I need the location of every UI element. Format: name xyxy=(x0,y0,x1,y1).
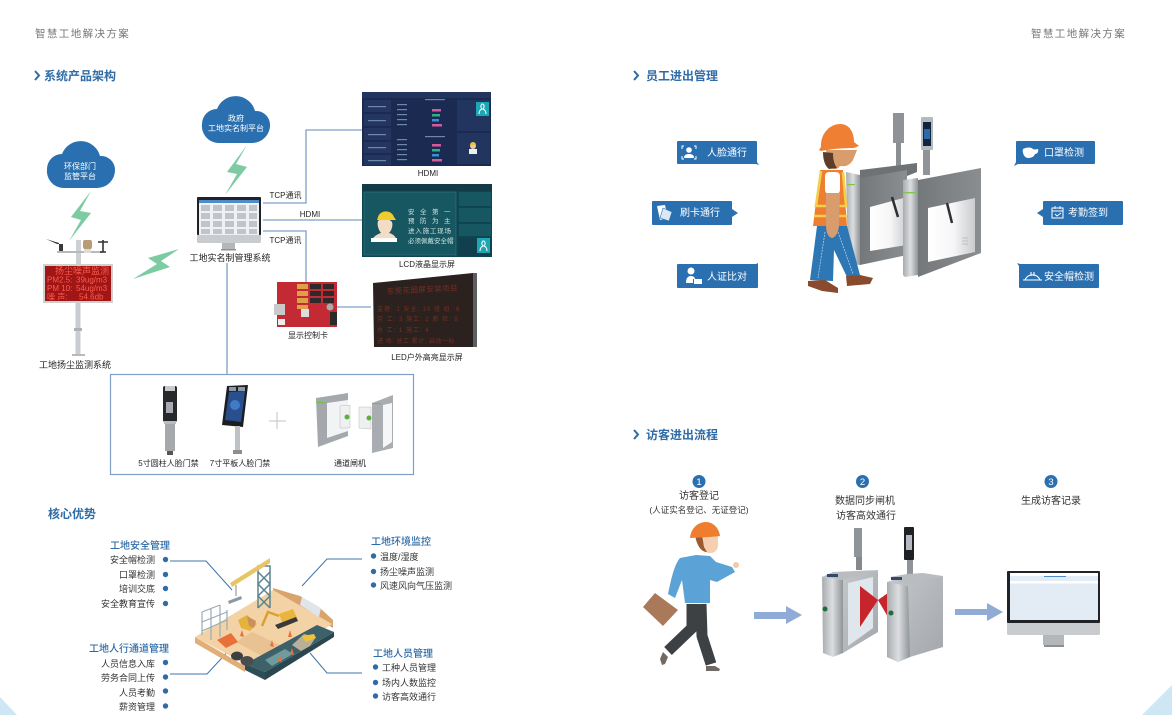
helmet xyxy=(819,124,859,151)
group: 工地安全管理 xyxy=(101,539,170,609)
dashboard screen: HDMI xyxy=(362,92,491,166)
step 2: 数据同步闸机 xyxy=(835,494,895,507)
shirt xyxy=(825,172,840,194)
LED outdoor screen: 进 场: 总工 累计: 启动一标 xyxy=(377,337,455,345)
label: TCP 1: TCP通讯 xyxy=(270,190,302,200)
pipes xyxy=(231,652,243,660)
group: 工地人员管理 xyxy=(373,647,436,702)
connection lines xyxy=(227,130,371,374)
label: 5-inch: 5寸圆柱人脸门禁 xyxy=(138,458,199,468)
scaffold xyxy=(202,605,227,640)
step 1: 1 xyxy=(696,477,702,488)
illustration: visitor walking xyxy=(643,522,739,671)
step 3 xyxy=(1021,475,1081,507)
LCD screen xyxy=(362,184,492,257)
device: channel gate xyxy=(316,393,393,453)
LCD screen: 必须佩戴安全帽 xyxy=(408,236,454,245)
group: 工地人行通道管理: 人员考勤 xyxy=(119,687,155,698)
cloud: 政府工地实名制平台 xyxy=(202,96,270,143)
isometric construction site xyxy=(195,558,334,680)
cloud: 环保部门监管平台 xyxy=(47,141,115,188)
dust monitoring station: PM2.5: xyxy=(47,276,72,284)
arrow 1 xyxy=(754,606,802,624)
heading: 系统产品架构: 系统产品架构 xyxy=(44,68,116,83)
arrow 2 xyxy=(955,603,1003,621)
group: 工地人行通道管理: 工地人行通道管理 xyxy=(89,642,169,655)
cloud: 政府工地实名制平台: 政府 xyxy=(228,113,244,123)
callout: 口罩检测 xyxy=(1014,141,1095,166)
LCD screen: 安全第一 xyxy=(408,207,456,216)
LED outdoor screen: 总 工: 1 施工: 4 xyxy=(377,326,430,334)
heading: 核心优势: 核心优势 xyxy=(48,506,96,521)
monitor: management system xyxy=(197,197,261,250)
excavator xyxy=(279,609,298,627)
label: HDMI link: HDMI xyxy=(300,210,320,219)
panel: core advantages xyxy=(89,535,452,712)
step 2: 访客高效通行 xyxy=(836,509,896,522)
step 3: 3 xyxy=(1048,477,1054,488)
dust monitoring station xyxy=(43,239,113,356)
step 1 xyxy=(649,475,749,515)
step 2 xyxy=(835,475,896,522)
label: dust monitoring: 工地扬尘监测系统 xyxy=(39,359,111,370)
icon: lightning left xyxy=(69,191,91,241)
callout: 安全帽检测: 安全帽检测 xyxy=(1044,270,1094,283)
group: 工地环境监控: 温度/湿度 xyxy=(380,551,419,562)
heading: 访客进出流程: 访客进出流程 xyxy=(646,427,718,442)
callout: 刷卡通行: 刷卡通行 xyxy=(680,206,720,219)
road xyxy=(245,664,265,680)
dust monitoring station: PM 10: xyxy=(47,284,72,293)
group: 工地环境监控: 工地环境监控 xyxy=(371,535,431,548)
cloud: 环保部门监管平台: 环保部门 xyxy=(64,161,96,171)
page header left: 智慧工地解决方案 xyxy=(35,27,130,40)
label: LCD: LCD液晶显示屏 xyxy=(399,259,455,269)
step 3: 生成访客记录 xyxy=(1021,494,1081,507)
group: 工地人行通道管理: 薪资管理 xyxy=(119,701,155,712)
leader lines xyxy=(170,559,362,674)
dust monitoring station: 54.6db xyxy=(79,292,104,302)
orange pile xyxy=(217,633,238,648)
corner decoration: bottom right xyxy=(1142,685,1172,715)
group: 工地安全管理: 安全帽检测 xyxy=(110,554,155,565)
dust monitoring station: 39ug/m3 xyxy=(76,276,108,284)
panel: visitor flow xyxy=(643,475,1100,671)
heading: 员工进出管理: 员工进出管理 xyxy=(646,68,718,83)
group: 工地人员管理: 场内人数监控 xyxy=(382,677,436,688)
fence block xyxy=(300,597,321,617)
dust monitoring station: 扬尘噪声监测 xyxy=(55,265,109,276)
group: 工地人员管理: 工种人员管理 xyxy=(382,662,436,673)
callout: 人证比对 xyxy=(677,263,758,288)
callout: 刷卡通行 xyxy=(652,201,738,225)
label: LED: LED户外高亮显示屏 xyxy=(391,352,463,362)
group: 工地人员管理: 工地人员管理 xyxy=(373,647,433,660)
group: 工地安全管理: 工地安全管理 xyxy=(110,539,170,552)
icon: lightning middle xyxy=(133,249,179,279)
monitor: visitor records xyxy=(1007,571,1100,647)
group: 工地人行通道管理 xyxy=(89,642,169,712)
device: 5-inch column face terminal xyxy=(163,386,177,455)
dump truck xyxy=(238,615,257,631)
step 2: 2 xyxy=(860,477,865,488)
illustration: worker xyxy=(808,124,873,293)
panel: access devices box xyxy=(110,374,414,474)
dust monitoring station: 54ug/m3 xyxy=(76,284,108,293)
label: HDMI: HDMI xyxy=(418,169,438,178)
cloud: 政府工地实名制平台: 工地实名制平台 xyxy=(208,123,264,133)
LED outdoor screen: 劳 工: 3 施工: 2 质 检: 8 xyxy=(377,315,459,323)
LED outdoor screen xyxy=(373,273,477,347)
callout: 考勤签到: 考勤签到 xyxy=(1068,206,1108,219)
step 1: 访客登记 xyxy=(679,489,719,502)
callout: 人脸通行: 人脸通行 xyxy=(707,146,747,159)
LCD screen: 预防为主 xyxy=(408,216,456,225)
group: 工地环境监控: 扬尘噪声监测 xyxy=(380,566,434,577)
cloud: 环保部门监管平台: 监管平台 xyxy=(64,171,96,181)
callout: 安全帽检测 xyxy=(1017,263,1099,288)
label: 7-inch: 7寸平板人脸门禁 xyxy=(210,458,270,468)
panel: system architecture xyxy=(39,92,492,474)
group: 工地人行通道管理: 人员信息入库 xyxy=(101,658,155,669)
LCD screen: 进入施工现场 xyxy=(408,226,452,235)
group: 工地安全管理: 安全教育宣传 xyxy=(101,598,155,609)
LED outdoor screen: 东莞花园屏安装项目 xyxy=(387,282,458,296)
page header right: 智慧工地解决方案 xyxy=(1031,27,1126,40)
illustration: tripod turnstile xyxy=(846,113,981,277)
crane xyxy=(258,566,270,608)
legs xyxy=(810,226,860,281)
group: 工地安全管理: 培训交底 xyxy=(119,583,155,594)
display control card xyxy=(274,282,337,327)
group: 工地人行通道管理: 劳务合同上传 xyxy=(101,672,155,683)
arm xyxy=(826,193,840,238)
corner decoration: bottom left xyxy=(0,697,17,715)
callout: 口罩检测: 口罩检测 xyxy=(1044,146,1084,159)
device: 7-inch tablet face terminal xyxy=(222,385,248,454)
LED outdoor screen: 监理: 1 安全: 10 班 组: 6 xyxy=(377,305,460,313)
illustration: flap barrier gate xyxy=(822,527,943,662)
callout: 人脸通行 xyxy=(677,141,759,165)
group: 工地安全管理: 口罩检测 xyxy=(119,569,155,580)
icon: plus xyxy=(269,412,286,429)
vest xyxy=(813,170,847,226)
group: 工地环境监控: 风速风向气压监测 xyxy=(380,580,452,591)
label: control card: 显示控制卡 xyxy=(288,330,328,340)
callout: 考勤签到 xyxy=(1037,201,1123,225)
label: gate: 通道闸机 xyxy=(334,458,366,468)
step 1: (人证实名登记、无证登记) xyxy=(649,505,749,515)
dust monitoring station: 噪 声: xyxy=(47,292,67,302)
group: 工地环境监控 xyxy=(371,535,452,591)
group: 工地人员管理: 访客高效通行 xyxy=(382,691,436,702)
callout: 人证比对: 人证比对 xyxy=(707,270,747,283)
truck on road xyxy=(292,634,316,651)
panel: employee access xyxy=(652,113,1123,293)
label: management system: 工地实名制管理系统 xyxy=(189,252,271,263)
label: TCP 2: TCP通讯 xyxy=(270,235,302,245)
head xyxy=(826,150,857,169)
icon: lightning top xyxy=(225,145,247,195)
